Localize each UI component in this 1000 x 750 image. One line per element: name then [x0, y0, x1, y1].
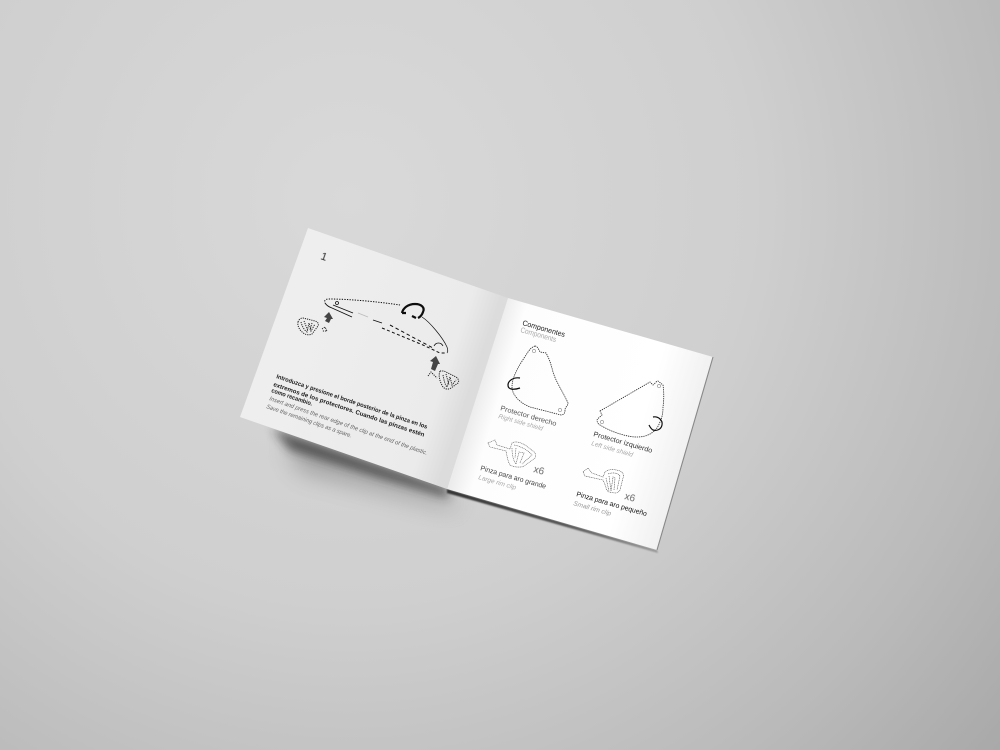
label: x6 small: x6: [623, 491, 637, 505]
label: small rim clip: Small rim clip: [572, 500, 612, 518]
shadow under the booklet: [272, 428, 658, 553]
icon: clip right: [428, 371, 459, 389]
text block: Spanish instruction: extremos de los protectores. Cuando las pinzas estén: [272, 382, 425, 439]
label: left side shield: Left side shield: [590, 440, 634, 459]
icon: small rim clip: [583, 468, 623, 493]
panel: right page: [447, 298, 713, 550]
label: x6 large: x6: [532, 464, 546, 478]
label: large rim clip: Pinza para aro grande: [479, 465, 547, 491]
text block: Spanish instruction: Introduzca y presione el borde posterior de la pinza en los: [275, 374, 429, 431]
heading: components: Components: [519, 325, 558, 344]
text block: Spanish instruction: como recambio.: [270, 388, 313, 408]
diagram: shield installation: [325, 299, 448, 353]
icon: strap: [508, 378, 520, 389]
heading: components: Componentes: [521, 318, 566, 339]
left side shield: [597, 381, 664, 437]
icon: strap loop: [402, 304, 424, 318]
label: right side shield: Right side shield: [497, 413, 544, 433]
label: small rim clip: Pinza para aro pequeño: [575, 491, 648, 518]
panel: left page: [240, 228, 508, 489]
text block: English instruction: Save the remaining clips as a spare.: [265, 404, 352, 439]
arrow: up right: [430, 356, 440, 371]
arrow: up left: [324, 312, 333, 323]
icon: strap: [649, 417, 662, 430]
label: right side shield: Protector derecho: [499, 405, 557, 428]
label: large rim clip: Large rim clip: [477, 474, 517, 492]
label: left side shield: Protector izquierdo: [592, 431, 653, 455]
text block: English instruction: Insert and press the rear edge of the clip at the end of the plastic.: [268, 396, 428, 457]
icon: clip left: [298, 318, 327, 335]
page number: 1: [319, 250, 329, 264]
icon: large rim clip: [488, 440, 536, 467]
right side shield: [508, 346, 568, 415]
shield outline: [325, 299, 448, 353]
